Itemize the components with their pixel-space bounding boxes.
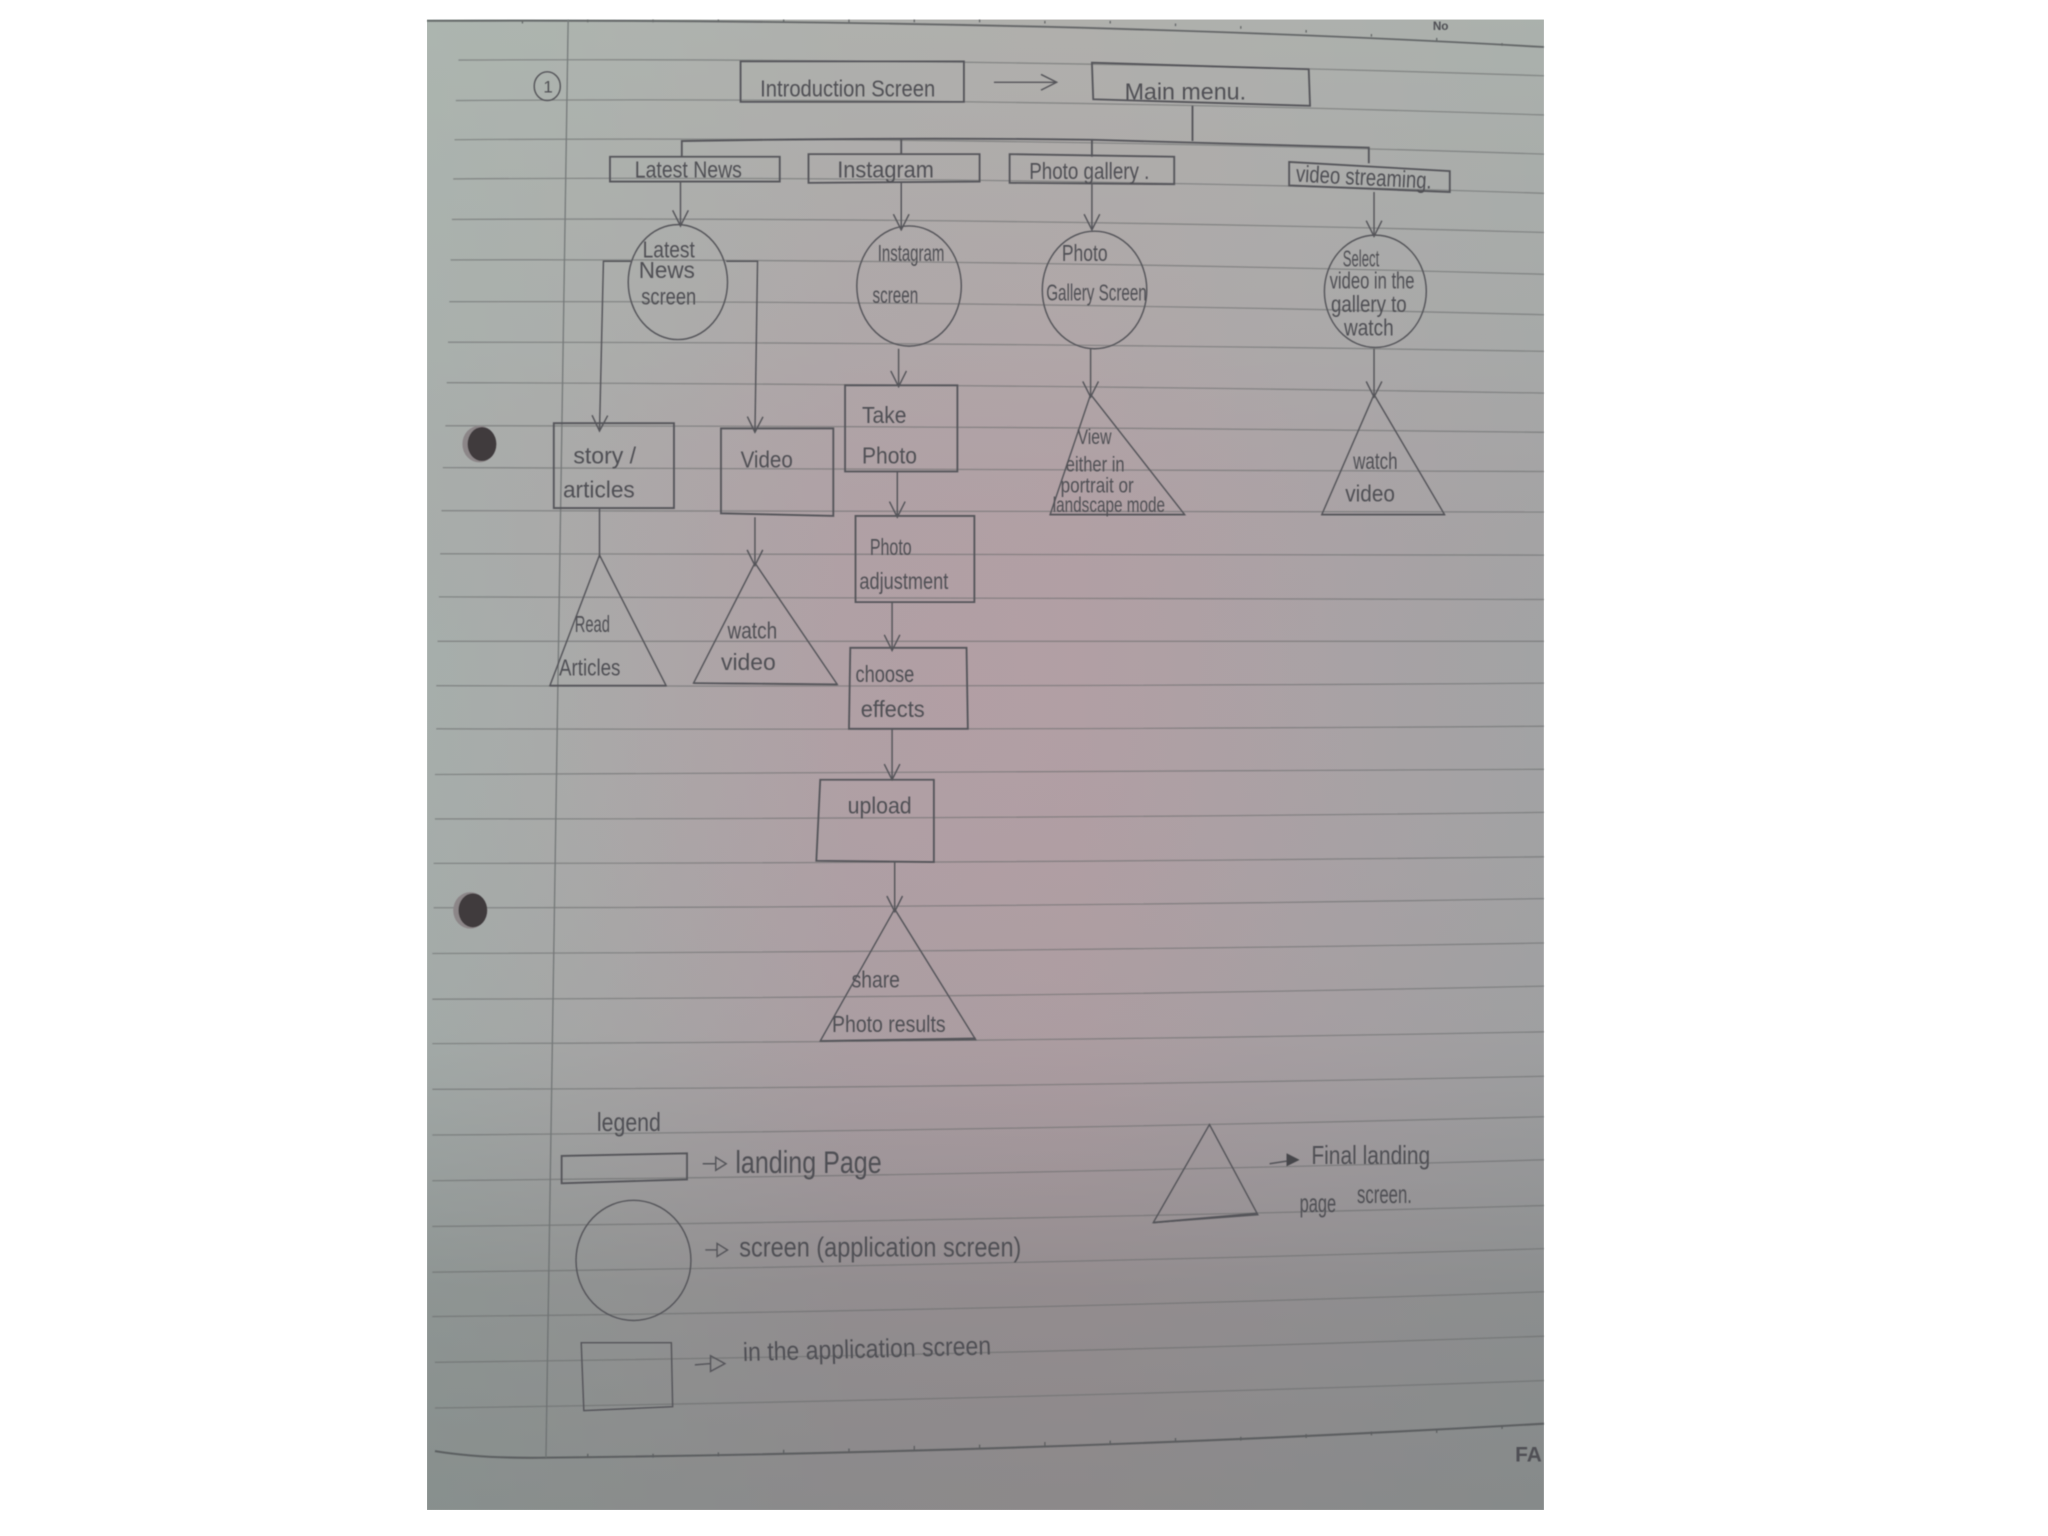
box: upload bbox=[816, 780, 934, 862]
triangle: watch video from news: watch bbox=[727, 618, 777, 644]
circle: instagram screen bbox=[857, 226, 961, 346]
legend: in the application screen bbox=[581, 1330, 991, 1411]
legend: final landing page screen: page bbox=[1300, 1188, 1336, 1218]
arrow: instagram to screen bbox=[900, 183, 902, 230]
arrow: story to read articles bbox=[599, 508, 601, 558]
box: latest news: Latest News bbox=[635, 157, 742, 183]
triangle: share photo results: Photo results bbox=[832, 1011, 946, 1037]
legend heading: legend bbox=[597, 1107, 661, 1137]
arrow: video screen to watch bbox=[1373, 349, 1375, 397]
box: introduction screen: Introduction Screen bbox=[760, 76, 935, 102]
box: instagram: Instagram bbox=[837, 157, 934, 183]
box: photo adjustment: Photo bbox=[870, 534, 912, 560]
circle: select video screen: Select bbox=[1343, 245, 1380, 271]
triangle: read articles: Articles bbox=[559, 654, 620, 680]
arrow: latest news screen to story bbox=[600, 261, 631, 431]
triangle: read articles: Read bbox=[575, 611, 610, 637]
legend: final landing page screen bbox=[1153, 1125, 1430, 1223]
circle: photo gallery screen: Photo bbox=[1062, 240, 1108, 266]
box: photo adjustment bbox=[856, 516, 974, 602]
triangle: read articles bbox=[550, 555, 666, 686]
circle: instagram screen: screen bbox=[872, 282, 918, 308]
circle: latest news screen: screen bbox=[641, 283, 696, 309]
punch hole: lower bbox=[453, 892, 487, 929]
legend: final landing page screen: Final landing bbox=[1311, 1140, 1430, 1170]
circle: select video screen: watch bbox=[1343, 315, 1394, 341]
box: story / articles: articles bbox=[563, 477, 635, 503]
legend: final landing page screen: screen. bbox=[1357, 1179, 1412, 1209]
box: video streaming: video streaming. bbox=[1295, 161, 1432, 194]
legend: landing page: landing Page bbox=[735, 1145, 882, 1180]
punch hole: upper bbox=[462, 426, 496, 462]
circle: select video screen: video in the bbox=[1330, 268, 1415, 294]
arrow: adjustment to effects bbox=[891, 602, 893, 650]
box: introduction screen bbox=[741, 61, 964, 102]
arrow: video streaming to screen bbox=[1373, 192, 1375, 236]
box: video: Video bbox=[741, 447, 793, 473]
triangle: view portrait or landscape: landscape mode bbox=[1053, 494, 1165, 517]
triangle: view portrait or landscape bbox=[1050, 394, 1185, 517]
arrow: introduction to main menu bbox=[994, 81, 1057, 83]
circle: photo gallery screen bbox=[1042, 231, 1147, 349]
arrow: take photo to adjustment bbox=[896, 472, 898, 517]
triangle: view portrait or landscape: View bbox=[1078, 426, 1112, 449]
box: story / articles: story / bbox=[573, 443, 637, 469]
header note: No: No bbox=[1433, 20, 1448, 33]
box: upload: upload bbox=[848, 793, 912, 819]
box: photo gallery: Photo gallery . bbox=[1029, 158, 1149, 184]
box: choose effects: choose bbox=[856, 661, 914, 687]
page number mark bbox=[534, 72, 560, 101]
arrow: latest news to screen bbox=[679, 182, 681, 226]
triangle: watch video: video bbox=[1345, 481, 1395, 507]
arrow: upload to share bbox=[894, 862, 896, 912]
circle: instagram screen: Instagram bbox=[878, 240, 944, 266]
box: video bbox=[721, 428, 833, 516]
arrow: effects to upload bbox=[891, 729, 893, 780]
circle: select video screen: gallery to bbox=[1331, 291, 1407, 317]
legend: in the application screen: in the application screen bbox=[743, 1330, 991, 1367]
arrow: video to watch video bbox=[754, 517, 756, 566]
legend: application screen: screen (application screen) bbox=[739, 1231, 1021, 1262]
triangle: watch video from news: video bbox=[721, 649, 776, 675]
triangle: view portrait or landscape: portrait or bbox=[1061, 474, 1134, 497]
page number mark: 1 bbox=[543, 78, 553, 97]
paper background bbox=[427, 20, 1544, 1510]
legend: application screen bbox=[576, 1200, 1021, 1320]
brand mark: FA bbox=[1515, 1444, 1542, 1467]
circle: photo gallery screen: Gallery Screen bbox=[1046, 279, 1147, 305]
legend: landing page bbox=[562, 1145, 882, 1183]
circle: latest news screen: News bbox=[639, 257, 695, 283]
box: main menu: Main menu. bbox=[1125, 78, 1246, 104]
arrow: photo gallery screen to view bbox=[1090, 349, 1092, 397]
box: photo adjustment: adjustment bbox=[859, 568, 949, 594]
triangle: share photo results: share bbox=[852, 966, 900, 992]
circle: latest news screen bbox=[628, 225, 728, 340]
circle: select video screen bbox=[1324, 235, 1426, 347]
arrow: photo gallery to screen bbox=[1091, 184, 1093, 230]
box: story / articles bbox=[554, 423, 674, 508]
box: main menu bbox=[1092, 63, 1310, 106]
triangle: watch video from news bbox=[694, 563, 837, 684]
box: take photo bbox=[845, 385, 957, 472]
arrow: latest news screen to video bbox=[726, 261, 758, 432]
triangle: view portrait or landscape: either in bbox=[1066, 454, 1125, 477]
box: take photo: Take bbox=[862, 402, 906, 428]
triangle: share photo results bbox=[820, 909, 976, 1041]
box: take photo: Photo bbox=[862, 443, 917, 469]
box: choose effects bbox=[849, 648, 968, 729]
box: choose effects: effects bbox=[861, 696, 925, 722]
circle: latest news screen: Latest bbox=[643, 236, 695, 262]
triangle: watch video: watch bbox=[1352, 448, 1398, 474]
arrow: instagram screen to take photo bbox=[898, 349, 900, 387]
connector: main menu to categories bbox=[682, 106, 1369, 163]
triangle: watch video bbox=[1322, 394, 1445, 515]
box: instagram bbox=[808, 154, 980, 183]
